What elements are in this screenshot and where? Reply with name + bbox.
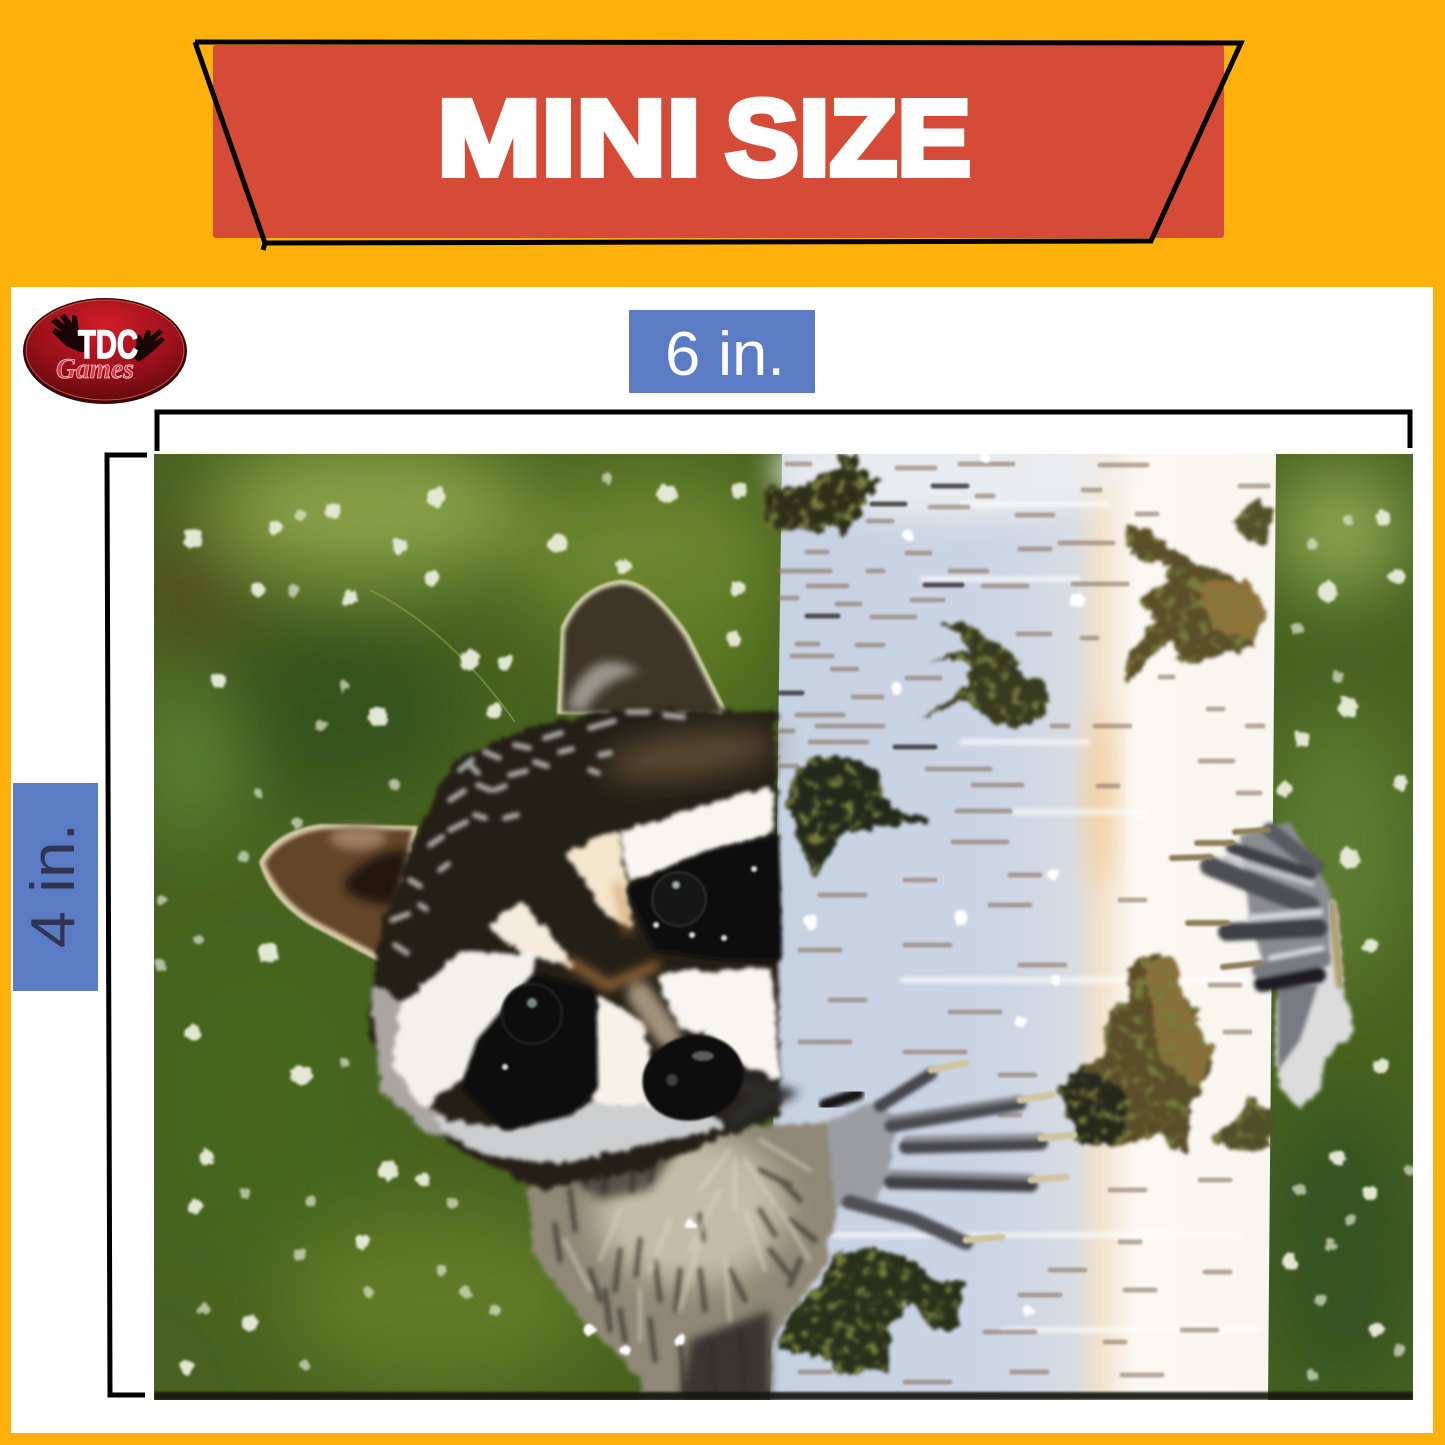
logo script: Games xyxy=(56,353,134,385)
title xyxy=(437,77,971,198)
banner outline xyxy=(195,42,1241,250)
width label xyxy=(629,310,815,393)
left ear xyxy=(259,824,418,965)
fur chest xyxy=(527,1123,845,1400)
right eye mask xyxy=(633,842,776,956)
bark markings xyxy=(780,464,1268,1382)
forest background xyxy=(140,440,1420,1400)
panel: white product area xyxy=(11,287,1433,1433)
title: MINI xyxy=(437,77,701,198)
logo: TDC Games xyxy=(23,298,187,404)
width bracket xyxy=(157,412,1410,451)
face white fur xyxy=(375,790,776,1160)
icon: right hand xyxy=(130,329,165,362)
title banner xyxy=(195,42,1241,250)
forehead shading xyxy=(603,721,777,789)
height label xyxy=(13,783,98,991)
raccoon xyxy=(259,580,1355,1400)
height bracket xyxy=(107,455,147,1395)
height label: 4 in. xyxy=(19,823,88,948)
paw on trunk xyxy=(825,1063,1074,1243)
snowflakes on mask xyxy=(505,869,754,1067)
twig xyxy=(370,590,515,722)
right eye xyxy=(652,872,706,926)
tan muzzle markings xyxy=(572,885,775,1118)
left eye xyxy=(502,984,562,1044)
lichen patches xyxy=(765,454,1273,1377)
head fur xyxy=(368,708,780,1190)
bottom shadow edge xyxy=(154,1392,1413,1400)
nose xyxy=(640,1034,744,1122)
snowy crown xyxy=(392,712,683,953)
top ear xyxy=(557,580,729,716)
paw behind trunk xyxy=(1172,822,1355,1110)
photo: raccoon peeking around a birch tree xyxy=(140,420,1420,1400)
bright bark streaks xyxy=(830,504,1260,1330)
width label: 6 in. xyxy=(665,320,785,389)
fur streaks xyxy=(555,1140,815,1390)
left eye mask xyxy=(470,982,590,1122)
birch trunk xyxy=(770,420,1276,1400)
icon: left hand xyxy=(51,314,88,352)
title: SIZE xyxy=(725,77,971,198)
logo wordmark: TDC xyxy=(78,323,138,367)
snowflakes xyxy=(160,458,1408,1375)
